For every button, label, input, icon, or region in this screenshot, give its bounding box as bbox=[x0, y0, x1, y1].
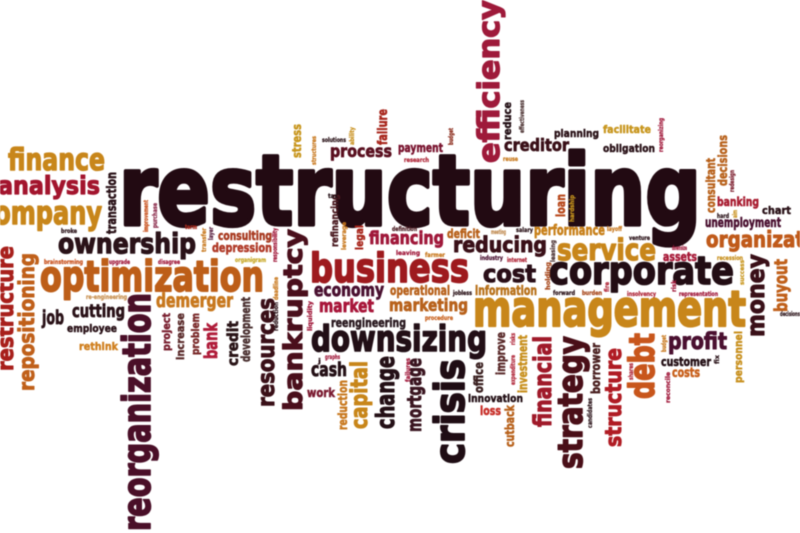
word: capital (vertical): capital bbox=[347, 361, 373, 429]
tiny horizontal words: upgrade bbox=[109, 258, 130, 266]
word: efficiency (vertical): efficiency bbox=[472, 0, 506, 163]
word: repositioning (vertical): repositioning bbox=[15, 253, 39, 391]
medium horizontal words: employee bbox=[67, 322, 117, 335]
word: finance: finance bbox=[8, 143, 105, 178]
word: bank (vertical): bank bbox=[202, 323, 222, 359]
medium horizontal words: assets bbox=[663, 250, 697, 264]
word: structure (vertical): structure bbox=[602, 348, 627, 447]
word: downsizing: downsizing bbox=[311, 319, 487, 360]
tiny vertical words: hardship bbox=[568, 195, 576, 222]
tiny horizontal words: j bbox=[317, 357, 321, 365]
word: marketing: marketing bbox=[389, 296, 468, 315]
tiny horizontal words: farmer bbox=[425, 251, 446, 259]
word: mortgage (vertical): mortgage bbox=[403, 358, 426, 432]
medium vertical words: project bbox=[160, 313, 173, 351]
medium horizontal words: operational bbox=[390, 284, 450, 299]
tiny vertical words: shares bbox=[627, 363, 635, 380]
medium horizontal words: planning bbox=[554, 127, 599, 140]
tiny vertical words: effectiveness bbox=[518, 100, 526, 133]
tiny horizontal words: definition bbox=[392, 225, 417, 233]
tiny vertical words: failures bbox=[404, 358, 412, 382]
tiny horizontal words: reuse bbox=[503, 155, 518, 163]
medium vertical words bbox=[105, 102, 745, 447]
medium horizontal words: rethink bbox=[79, 340, 119, 353]
word: service: service bbox=[557, 233, 656, 267]
tiny horizontal words: procedure bbox=[425, 314, 453, 322]
medium horizontal words: loss bbox=[480, 404, 501, 418]
word: market: market bbox=[319, 297, 374, 317]
medium vertical words: decisions bbox=[716, 135, 730, 186]
medium vertical words: consultant bbox=[704, 158, 718, 213]
tiny vertical words bbox=[142, 100, 746, 428]
tiny horizontal words: representation bbox=[679, 290, 718, 298]
medium horizontal words: costs bbox=[672, 366, 700, 381]
medium horizontal words: deficit bbox=[447, 227, 480, 241]
word: creditor: creditor bbox=[504, 136, 570, 155]
word: debt (vertical): debt bbox=[623, 333, 663, 399]
medium horizontal words: work bbox=[307, 386, 336, 400]
medium horizontal words: innovation bbox=[468, 392, 523, 405]
medium vertical words: loan bbox=[554, 194, 568, 217]
tiny vertical words: reduction bbox=[272, 302, 280, 331]
word: economy: economy bbox=[314, 281, 384, 301]
medium vertical words: stress bbox=[290, 124, 304, 158]
medium horizontal words: chart bbox=[762, 204, 791, 217]
tiny vertical words: deadline bbox=[272, 277, 280, 300]
medium vertical words: office bbox=[472, 362, 486, 393]
word: demerger: demerger bbox=[156, 291, 234, 312]
medium vertical words: problem bbox=[189, 313, 202, 355]
word: reducing: reducing bbox=[453, 233, 547, 257]
medium vertical words: borrower bbox=[589, 343, 603, 394]
tiny horizontal words: forward bbox=[553, 289, 575, 297]
word: financing: financing bbox=[369, 229, 444, 249]
tiny horizontal words: organigram bbox=[235, 256, 266, 264]
tiny vertical words: structures bbox=[310, 136, 318, 165]
word: money (vertical): money bbox=[742, 254, 770, 337]
medium vertical words: improve bbox=[494, 332, 508, 375]
medium vertical words: reduction bbox=[336, 380, 350, 430]
tiny vertical words: expenditure bbox=[509, 355, 517, 385]
tiny horizontal words: solutions bbox=[322, 136, 346, 144]
medium vertical words: increase bbox=[174, 313, 187, 360]
word: profit: profit bbox=[668, 329, 727, 355]
word: corporate: corporate bbox=[549, 249, 734, 293]
medium vertical words: transaction bbox=[105, 172, 120, 234]
medium horizontal words: facilitate bbox=[603, 123, 651, 136]
tiny vertical words: aim bbox=[731, 210, 739, 218]
tiny vertical words: risk bbox=[670, 279, 678, 292]
word: financial (vertical): financial bbox=[529, 336, 557, 427]
tiny vertical words: fix bbox=[713, 354, 721, 364]
word: buyout (vertical): buyout bbox=[772, 259, 792, 312]
medium horizontal words: reengineering bbox=[331, 316, 406, 330]
medium vertical words: refinancing bbox=[330, 194, 341, 247]
tiny vertical words: transfer bbox=[200, 227, 208, 252]
medium vertical words: cutback bbox=[503, 404, 517, 447]
tiny vertical words: liquidity bbox=[306, 300, 314, 331]
medium vertical words: legal bbox=[353, 225, 366, 250]
tiny vertical words: leverage bbox=[340, 221, 348, 250]
word: reorganization (vertical): reorganization bbox=[115, 293, 159, 531]
tiny horizontal words: broke bbox=[61, 227, 77, 235]
tiny vertical words: budget bbox=[660, 335, 668, 352]
tiny vertical words: risks bbox=[509, 333, 517, 345]
tiny vertical words: candidates bbox=[586, 398, 594, 428]
tiny horizontal words: tax bbox=[328, 192, 339, 200]
word: optimization: optimization bbox=[40, 252, 264, 301]
tiny vertical words: budget bbox=[447, 128, 455, 145]
word: ownership: ownership bbox=[58, 227, 196, 260]
word: analysis: analysis bbox=[0, 171, 100, 200]
medium horizontal words: customer bbox=[661, 355, 711, 369]
tiny horizontal words: term bbox=[185, 223, 197, 231]
tiny horizontal words: industry bbox=[480, 254, 504, 262]
tiny vertical words: fire bbox=[603, 282, 611, 292]
tiny vertical words: success bbox=[738, 260, 746, 285]
medium horizontal words: banking bbox=[717, 195, 759, 209]
word: process: process bbox=[330, 142, 392, 161]
word: credit (vertical): credit bbox=[224, 320, 242, 366]
medium horizontal words: performance bbox=[534, 223, 605, 239]
tiny vertical words: purchase bbox=[151, 203, 159, 228]
word: change (vertical): change bbox=[371, 356, 400, 429]
tiny horizontal words: venture bbox=[629, 234, 650, 242]
tiny vertical words: reconcile bbox=[664, 371, 672, 403]
word: cutting: cutting bbox=[72, 302, 125, 322]
tiny horizontal words: brainstorming bbox=[44, 258, 83, 266]
tiny horizontal words: research bbox=[404, 156, 429, 164]
word: cash: cash bbox=[311, 360, 347, 381]
medium horizontal words: consulting bbox=[218, 229, 272, 243]
tiny vertical words: layer bbox=[207, 226, 215, 240]
tiny horizontal words: re-engineering bbox=[86, 293, 127, 301]
tiny horizontal words: internet bbox=[507, 256, 527, 264]
word: crisis (vertical): crisis bbox=[426, 359, 474, 464]
medium vertical words: investment bbox=[516, 335, 530, 393]
word: bankruptcy (vertical): bankruptcy bbox=[279, 229, 309, 411]
tiny horizontal words: insolvency bbox=[627, 290, 657, 298]
word: job: job bbox=[41, 308, 64, 329]
tiny horizontal words: downsize bbox=[672, 244, 687, 252]
medium vertical words: reduce bbox=[501, 102, 514, 140]
word: resources (vertical): resources bbox=[254, 298, 280, 407]
tiny horizontal words: leaving bbox=[396, 249, 420, 257]
tiny horizontal words: jobless bbox=[452, 289, 472, 297]
tiny vertical words: holding bbox=[544, 262, 552, 290]
tiny horizontal words: burden bbox=[582, 289, 602, 297]
word: strategy (vertical): strategy bbox=[551, 336, 590, 469]
tiny horizontal words: meeting bbox=[491, 228, 506, 236]
tiny horizontal words: hard bbox=[717, 212, 729, 220]
medium vertical words: development bbox=[239, 297, 253, 362]
word: business: business bbox=[310, 246, 469, 292]
medium horizontal words: payment bbox=[398, 141, 443, 155]
medium horizontal words: information bbox=[475, 284, 537, 299]
tiny vertical words: improvement bbox=[142, 200, 150, 232]
word: cost: cost bbox=[483, 260, 536, 288]
medium horizontal words: depression bbox=[212, 241, 272, 255]
medium vertical words: personnel bbox=[732, 331, 745, 383]
tiny vertical words: redesign bbox=[728, 170, 736, 192]
tiny vertical words: ability bbox=[348, 126, 356, 145]
medium horizontal words bbox=[67, 123, 791, 418]
tiny horizontal words: recession bbox=[717, 254, 743, 262]
tiny horizontal words bbox=[44, 136, 800, 365]
tiny vertical words: leasing bbox=[549, 240, 557, 262]
tiny horizontal words: graphs bbox=[325, 353, 340, 361]
tiny horizontal words: salary bbox=[516, 226, 534, 234]
tiny vertical words: responsibility bbox=[271, 227, 279, 262]
tiny horizontal words: disagree bbox=[158, 258, 180, 266]
medium vertical words: failure bbox=[376, 109, 391, 145]
tiny vertical words: reorganizing bbox=[657, 118, 665, 152]
tiny horizontal words: layoff bbox=[607, 225, 623, 233]
medium horizontal words: obligation bbox=[603, 142, 655, 155]
